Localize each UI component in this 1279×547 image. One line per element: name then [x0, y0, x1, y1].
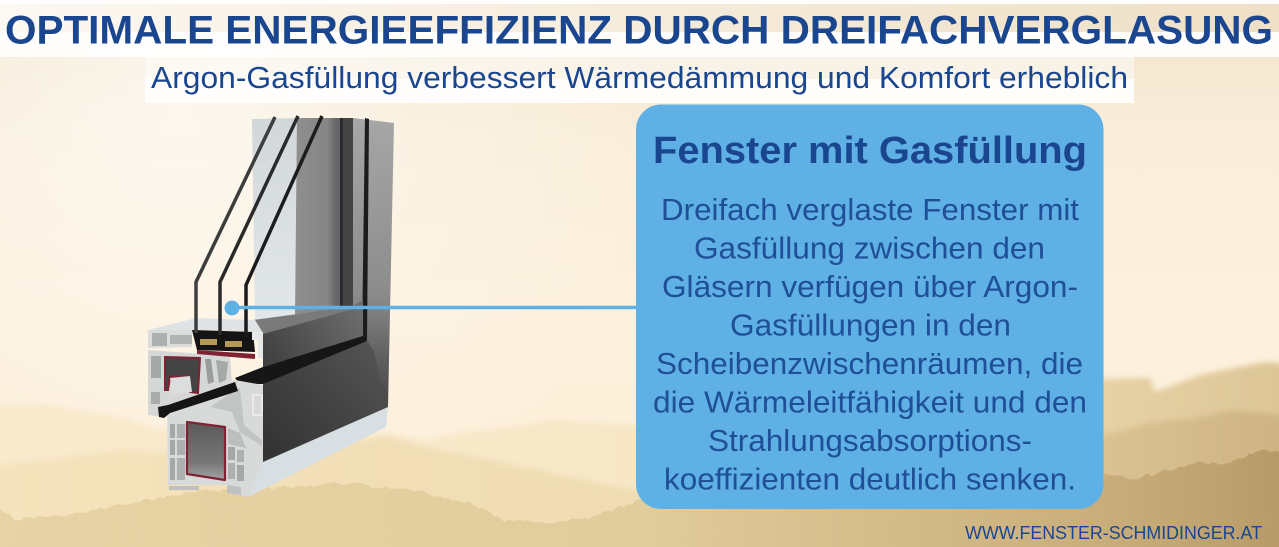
lower reinforcement: [187, 422, 225, 480]
footer website address: WWW.FENSTER-SCHMIDINGER.AT: [965, 523, 1262, 543]
gasket gap strip: [235, 336, 367, 384]
panel body text: Scheibenzwischenräumen, die: [656, 347, 1083, 381]
glass pane 1: [196, 117, 275, 333]
panel body text: Gasfüllung zwischen den: [694, 232, 1045, 266]
black gasket: [158, 382, 238, 418]
rear glass view: [252, 118, 298, 322]
upper reinforcement: [165, 357, 200, 393]
connector line: [232, 306, 640, 309]
window cross-section illustration: [148, 116, 394, 497]
glass pane 2: [220, 116, 298, 335]
glass pane 3: [246, 116, 322, 337]
connector dot: [224, 300, 240, 316]
info panel: [636, 104, 1104, 509]
panel body text: [653, 193, 1087, 496]
inner ledge: [253, 307, 350, 334]
upper section profile: [148, 330, 232, 417]
sill: [240, 406, 388, 497]
panel heading: Fenster mit Gasfüllung: [653, 130, 1087, 172]
panel body text: Gläsern verfügen über Argon-: [662, 270, 1078, 304]
aluminium clip strip: [252, 332, 263, 358]
lower frame face: [263, 340, 388, 462]
title band: [0, 0, 1279, 57]
panel body text: Strahlungsabsorptions-: [708, 424, 1032, 458]
panel body text: die Wärmeleitfähigkeit und den: [653, 386, 1087, 420]
upper sash face: [263, 300, 363, 367]
panel body text: koeffizienten deutlich senken.: [664, 462, 1076, 496]
lower section profile: [167, 380, 263, 497]
panel body text: Dreifach verglaste Fenster mit: [661, 193, 1080, 227]
subtitle: Argon-Gasfüllung verbessert Wärmedämmung und Komfort erheblich: [151, 60, 1128, 95]
title: OPTIMALE ENERGIEEFFIZIENZ DURCH DREIFACHVERGLASUNG: [5, 8, 1273, 52]
top of frame section: [148, 318, 263, 333]
subtitle band: [145, 57, 1134, 103]
frame reveal and right frame: [295, 118, 394, 420]
panel body text: Gasfüllungen in den: [730, 308, 1011, 342]
glazing spacers: [192, 330, 255, 359]
